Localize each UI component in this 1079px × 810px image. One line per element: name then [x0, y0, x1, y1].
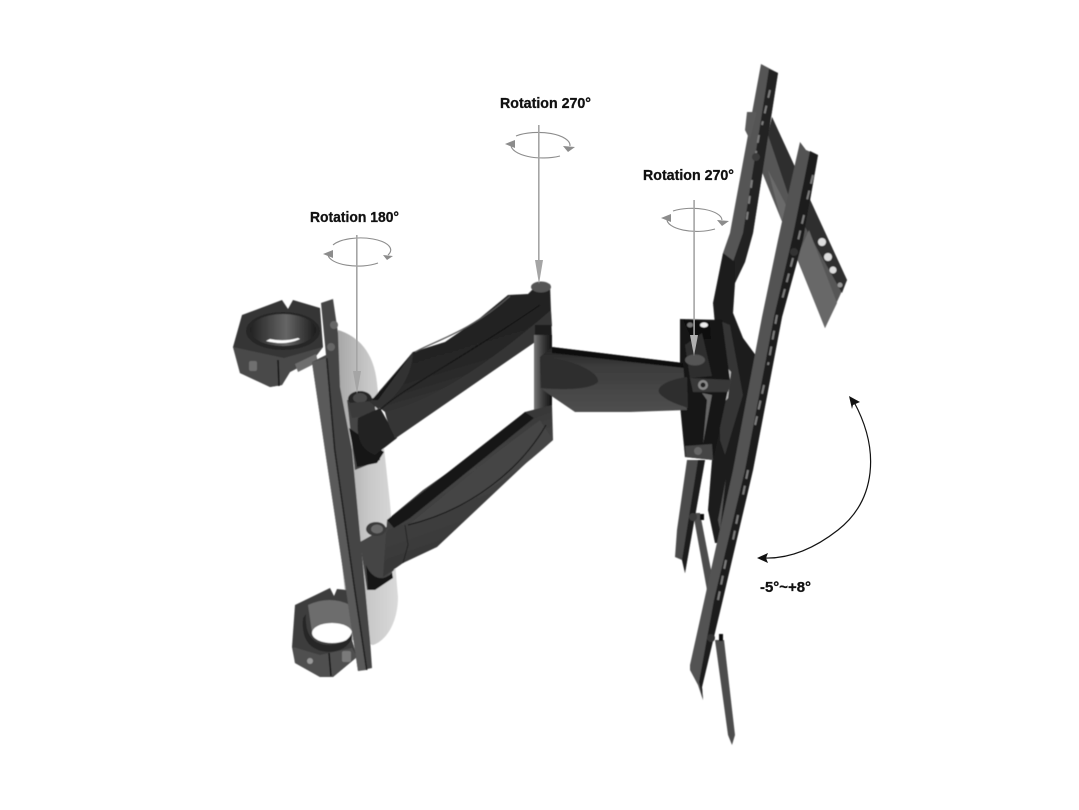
- label: Rotation 270 head: Rotation 270°: [643, 168, 734, 184]
- elbow post: [534, 325, 552, 415]
- rotation ring with arrowheads: [505, 132, 575, 158]
- center mounting plate: [708, 253, 757, 543]
- upper pivot on wall plate: [348, 391, 397, 455]
- label: Rotation 180: Rotation 180°: [310, 210, 399, 226]
- upper arm: [370, 282, 552, 438]
- forearm: [540, 347, 688, 412]
- lower wall clamp: [292, 588, 357, 677]
- back TV rail: [723, 64, 778, 283]
- rotation indicator: head pivot 270 degrees: [643, 168, 734, 356]
- rotation indicator: elbow pivot 270 degrees: [500, 96, 591, 284]
- tilt bracket: [680, 319, 732, 460]
- upper wall clamp: [233, 300, 323, 387]
- axis arrow: [535, 125, 543, 284]
- wall plate: [312, 299, 394, 671]
- lower pivot on wall plate: [366, 522, 386, 536]
- rotation ring with arrowheads: [661, 208, 729, 231]
- translucent wall plate cover: [325, 330, 398, 645]
- label: Rotation 270 elbow: Rotation 270°: [500, 96, 591, 112]
- front TV rail: [690, 142, 818, 700]
- axis arrow: [690, 200, 698, 356]
- upper cross brace: [760, 117, 847, 328]
- lower arm: [383, 405, 553, 577]
- axis arrow: [353, 235, 361, 394]
- rotation indicator: wall pivot 180 degrees: [310, 210, 399, 394]
- tilt indicator: [757, 396, 871, 596]
- label: tilt range: -5°~+8°: [760, 579, 811, 596]
- mount hardware: [233, 64, 847, 745]
- back TV rail, lower section: [675, 460, 705, 573]
- curved tilt arrow: [757, 396, 871, 563]
- lower cross brace, lower section: [715, 640, 735, 745]
- lower cross brace, upper section: [693, 513, 712, 590]
- rotation ring with arrowheads: [323, 238, 393, 266]
